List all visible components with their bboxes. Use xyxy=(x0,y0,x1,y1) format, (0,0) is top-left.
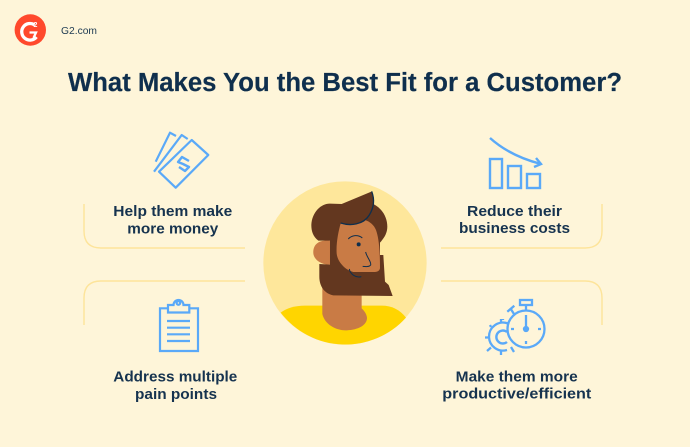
eyebrow xyxy=(348,236,362,239)
label: address pain points: Address multiple xyxy=(113,368,237,386)
face xyxy=(337,220,380,272)
icon: stopwatch and gear xyxy=(485,300,544,355)
label: more productive: productive/efficient xyxy=(442,386,591,402)
label: address pain points: pain points xyxy=(135,386,217,403)
neck xyxy=(322,283,367,330)
nose xyxy=(363,252,371,267)
eye xyxy=(357,242,361,246)
logo: G2 xyxy=(15,14,46,46)
frame: bottom right xyxy=(441,281,602,325)
logo: G2: 2 xyxy=(34,22,38,29)
label: reduce business costs: business costs xyxy=(459,220,570,237)
frame: top right xyxy=(441,204,602,248)
frame: bottom left xyxy=(84,281,245,325)
label: more productive xyxy=(442,368,591,402)
smile xyxy=(349,269,361,277)
illustration: bearded man portrait xyxy=(263,181,427,345)
hair line xyxy=(341,191,374,224)
label: help them make more money: Help them make xyxy=(113,203,232,220)
brand label: G2.com: G2.com xyxy=(61,25,97,37)
label: address pain points xyxy=(113,368,237,403)
ear xyxy=(313,240,330,265)
icon: clipboard xyxy=(160,300,198,351)
shirt xyxy=(281,306,406,345)
label: reduce business costs xyxy=(459,203,570,237)
frame: top left xyxy=(84,204,245,248)
title: What Makes You the Best Fit for a Customer? xyxy=(68,69,622,97)
label: help them make more money: more money xyxy=(127,220,219,238)
label: help them make more money xyxy=(113,203,232,238)
label: reduce business costs: Reduce their xyxy=(467,203,562,220)
label: more productive: Make them more xyxy=(456,368,578,385)
icon: falling costs bar chart xyxy=(490,138,541,188)
hair and beard xyxy=(311,191,393,296)
icon: money bills xyxy=(154,133,208,188)
